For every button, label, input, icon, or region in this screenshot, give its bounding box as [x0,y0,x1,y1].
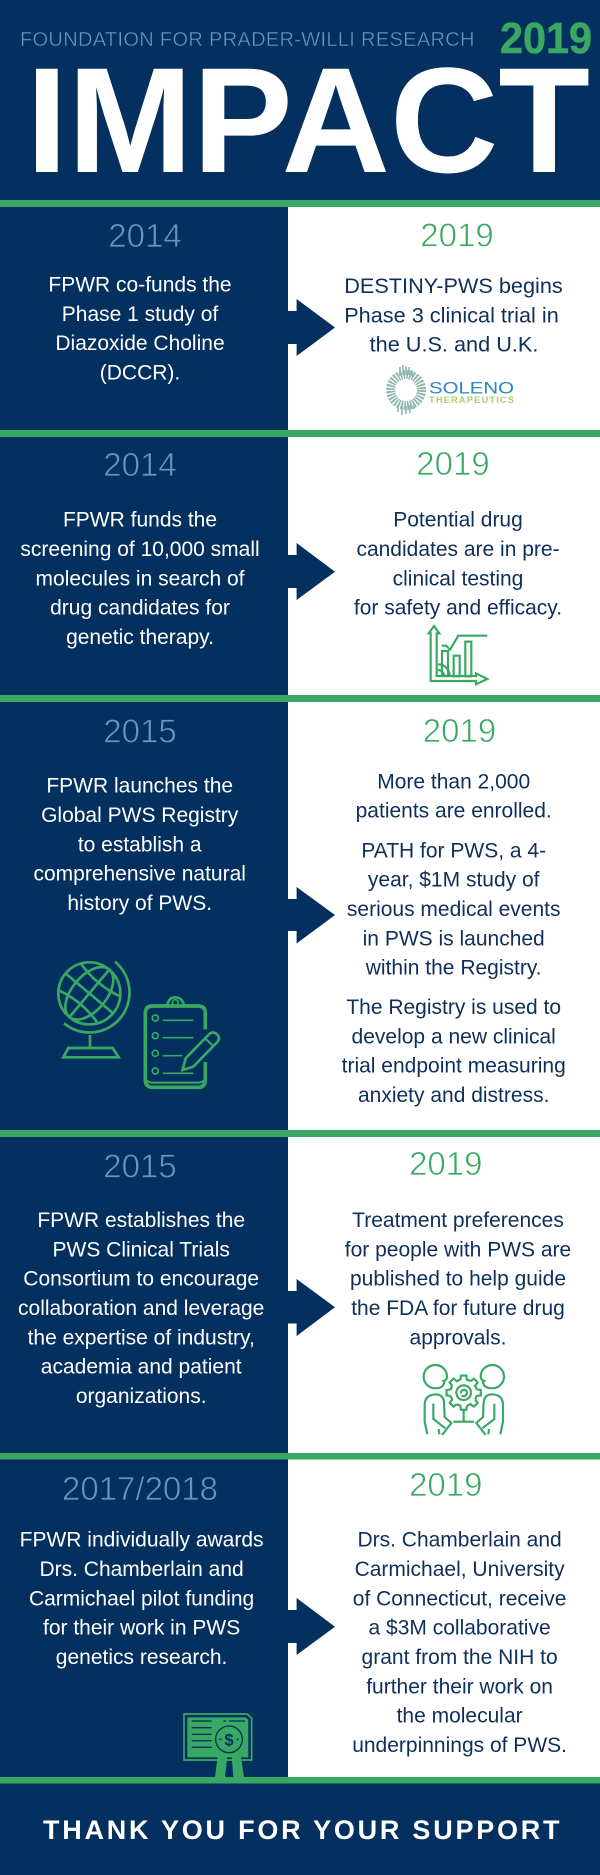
text block: grant from the NIH to [362,1646,558,1669]
panel: row 1 right [344,217,563,415]
panel: row 2 right [354,445,562,684]
text block: Phase 1 study of [62,303,218,326]
text: PATH for PWS: in PWS is launched [363,927,545,950]
year 2014: 2014 [108,217,182,254]
text: enrollment: patients are enrolled. [356,800,552,823]
arrow 3 [288,887,335,944]
text: PATH for PWS: within the Registry. [365,957,542,980]
text: clinical trial endpoint: anxiety and distress. [358,1084,549,1107]
arrow 4 [288,1279,335,1336]
header year: 2019 [500,14,592,63]
text block: for people with PWS are [345,1238,571,1261]
text block: candidates are in pre- [356,538,560,561]
icon: funding certificate: $ [224,1730,234,1749]
text block: a $3M collaborative [369,1617,551,1640]
text: PATH for PWS: PATH for PWS, a 4- [361,839,546,862]
text block: Potential drug [393,509,523,532]
year 2019: 2019 [409,1145,483,1182]
text block: the FDA for future drug [351,1297,565,1320]
logo: Soleno Therapeutics [390,365,514,415]
text: clinical trial endpoint: develop a new clinical [352,1025,556,1048]
text block: FPWR establishes the [37,1209,245,1232]
text block: history of PWS. [67,892,212,915]
arrow 1 [288,299,335,356]
wordmark: SOLENO [429,378,514,398]
text block: FPWR individually awards [20,1529,264,1552]
text block: FPWR launches the [46,775,233,798]
header [20,14,592,204]
arrow 2 [288,543,335,600]
year 2019: 2019 [416,445,490,482]
right panel: row 1 background [288,207,600,430]
text block: the U.S. and U.K. [370,332,538,357]
text block: (DCCR). [100,362,180,384]
text block: Global PWS Registry [41,804,239,827]
logo: Soleno Therapeutics: THERAPEUTICS [429,395,514,405]
right panel: row 4 background [288,1137,600,1453]
right panel: row 3 background [288,702,600,1130]
text block: comprehensive natural [33,863,246,886]
text block: Carmichael pilot funding [29,1587,254,1610]
text block: collaboration and leverage [18,1297,264,1320]
text block: for their work in PWS [43,1617,240,1640]
text block: DESTINY-PWS begins [344,273,563,298]
text block: of Connecticut, receive [353,1587,566,1610]
panel: row 3 left [33,712,246,1087]
text block: academia and patient [41,1356,242,1379]
right panel: row 2 background [288,437,600,695]
icon: sunburst ring [390,365,422,415]
text block: Consortium to encourage [23,1268,259,1291]
text: PATH for PWS: serious medical events [347,898,561,921]
icon: clipboard with pen [145,997,219,1087]
icon: funding certificate [184,1714,252,1777]
text block: genetic therapy. [66,626,214,649]
text block: genetics research. [56,1646,227,1669]
panel: row 5 right [352,1466,567,1757]
text block: further their work on [366,1675,553,1698]
text block: Phase 3 clinical trial in [344,302,559,327]
text block: FPWR co-funds the [48,274,232,296]
year 2015: 2015 [103,712,177,749]
text block: underpinnings of PWS. [352,1734,567,1757]
text: clinical trial endpoint: The Registry is used to [346,996,561,1019]
footer: thank you message: THANK YOU FOR YOUR SUPPORT [43,1815,560,1845]
text block: to establish a [78,833,202,856]
icon: globe [46,950,133,1057]
arrow 5 [288,1598,335,1655]
text: PATH for PWS: year, $1M study of [368,869,540,892]
text block: organizations. [76,1385,207,1408]
year 2019: 2019 [423,712,496,749]
year 2014: 2014 [103,446,177,483]
text block: for safety and efficacy. [354,597,562,620]
year 2019: 2019 [409,1466,483,1503]
organization name: FOUNDATION FOR PRADER-WILLI RESEARCH [20,29,474,51]
right panel: row 5 background [288,1459,600,1777]
text: clinical trial endpoint: trial endpoint measuring [342,1055,566,1078]
year 2015: 2015 [103,1147,177,1184]
text block: drug candidates for [50,597,230,620]
panel: row 2 left [20,446,260,649]
panel: row 4 left [18,1147,264,1408]
text block: Diazoxide Choline [55,332,225,355]
text block: clinical testing [393,567,523,590]
text block: Drs. Chamberlain and [357,1529,562,1552]
text block: molecules in search of [36,567,245,590]
text block: screening of 10,000 small [20,538,260,561]
text block: FPWR funds the [63,509,217,532]
panel: row 5 left [20,1470,264,1777]
text: enrollment: More than 2,000 [377,770,530,793]
text block: Carmichael, University [355,1558,565,1581]
text block: the expertise of industry, [28,1326,255,1349]
year 2017/2018: 2017/2018 [62,1470,218,1507]
text block: PWS Clinical Trials [53,1238,230,1261]
icon: rising bar chart [429,626,487,684]
text block: approvals. [410,1326,506,1349]
text block: published to help guide [350,1268,566,1291]
icon: two people and gear [424,1365,504,1435]
title: IMPACT: IMPACT [26,36,590,204]
icon: globe and clipboard [46,950,219,1087]
panel: row 3 right [342,712,566,1107]
text block: Treatment preferences [352,1209,564,1232]
text block: Drs. Chamberlain and [39,1558,244,1581]
text block: the molecular [397,1705,523,1728]
year 2019: 2019 [420,217,494,254]
panel: row 4 right [345,1145,571,1435]
panel: row 1 left [48,217,232,384]
